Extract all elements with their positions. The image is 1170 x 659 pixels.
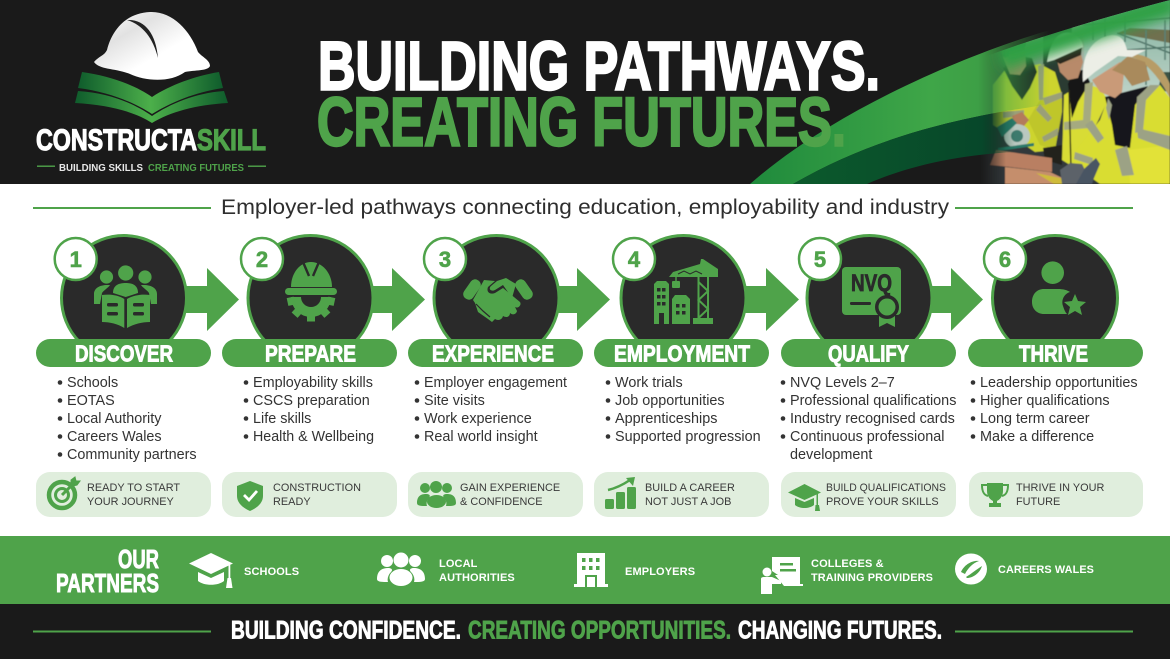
planks [990, 150, 1052, 172]
number badge [613, 238, 655, 280]
swoosh: green arc [750, 3, 1170, 184]
bullet list: Local Authority [67, 411, 162, 427]
bullet list: development [790, 447, 872, 463]
step 6: thrive [968, 236, 1143, 517]
pill heading: THRIVE [1019, 340, 1088, 366]
icon: careers wales emblem [955, 554, 987, 584]
footer slogan [231, 616, 942, 644]
bullet list: Work experience [424, 411, 532, 427]
number badge: 5 [814, 247, 826, 272]
footer slogan: CHANGING FUTURES. [738, 616, 942, 644]
pill heading: EMPLOYMENT [614, 340, 750, 366]
icon: office building [574, 553, 608, 587]
bullet list: Apprenticeships [615, 411, 717, 427]
arrow [369, 268, 425, 331]
icon: graduation cap [189, 553, 233, 588]
step 2: prepare [222, 236, 425, 517]
outcome chip: PROVE YOUR SKILLS [826, 496, 939, 508]
icon: green open book [75, 72, 228, 123]
number badge: 3 [439, 247, 451, 272]
icon: rising bar chart [605, 477, 636, 509]
number badge [241, 238, 283, 280]
partners heading: OUR [118, 544, 159, 574]
bullet list: Job opportunities [615, 393, 725, 409]
partner: local authorities: AUTHORITIES [439, 572, 515, 584]
worker left [993, 64, 1062, 152]
bullet list [58, 375, 197, 463]
number badge [984, 238, 1026, 280]
step 4: employment [594, 236, 799, 517]
bullet list: Community partners [67, 447, 197, 463]
bullet list: Long term career [980, 411, 1090, 427]
footer slogan: CREATING OPPORTUNITIES. [468, 616, 731, 644]
number badge [55, 238, 97, 280]
icon: person with star [1032, 261, 1086, 315]
icon: shield [237, 481, 263, 511]
footer band [0, 604, 1170, 659]
number badge [424, 238, 466, 280]
bullet list: Employability skills [253, 375, 373, 391]
partner: employers [574, 553, 695, 587]
partner: colleges and training providers: TRAINING PROVIDERS [811, 572, 933, 584]
circle [807, 236, 932, 360]
partners band [0, 536, 1170, 604]
outcome chip: CONSTRUCTION [273, 482, 361, 494]
subtitle strapline: Employer-led pathways connecting education, employability and industry [221, 195, 949, 219]
title [317, 28, 880, 160]
outcome chip: & CONFIDENCE [460, 496, 543, 508]
circle [621, 236, 746, 360]
arrow [183, 268, 239, 331]
outcome chip: GAIN EXPERIENCE [460, 482, 560, 494]
bullet list: Employer engagement [424, 375, 567, 391]
pill heading [36, 339, 211, 367]
pill heading [222, 339, 397, 367]
number badge: 6 [999, 247, 1011, 272]
bullet list: Work trials [615, 375, 683, 391]
bullet list: Make a difference [980, 429, 1094, 445]
logo [36, 12, 266, 174]
logo tagline: BUILDING SKILLS [59, 162, 143, 174]
partner: colleges and training providers: COLLEGES & [811, 558, 884, 570]
step 5: qualify [781, 236, 983, 517]
outcome chip: READY TO START [87, 482, 180, 494]
icon: target [49, 477, 80, 508]
header background [0, 0, 1170, 184]
outcome chip [781, 472, 956, 517]
outcome chip: READY [273, 496, 311, 508]
bullet list: Real world insight [424, 429, 538, 445]
bullet list: Continuous professional [790, 429, 944, 445]
number badge: 4 [628, 247, 641, 272]
bullet list [781, 375, 956, 463]
partner: colleges and training providers [761, 557, 933, 594]
outcome chip: FUTURE [1016, 496, 1060, 508]
pill heading [968, 339, 1143, 367]
bullet list: Health & Wellbeing [253, 429, 374, 445]
partner: careers wales [955, 554, 1094, 584]
worker right [1072, 85, 1170, 184]
outcome chip [969, 472, 1143, 517]
bullet list: Schools [67, 375, 118, 391]
bullet list: Life skills [253, 411, 311, 427]
arrow [555, 268, 610, 331]
footer slogan: BUILDING CONFIDENCE. [231, 616, 461, 644]
outcome chip [222, 472, 397, 517]
bullet list [415, 375, 567, 445]
bullet list: Supported progression [615, 429, 761, 445]
icon: graduation cap [788, 484, 821, 511]
outcome chip: NOT JUST A JOB [645, 496, 731, 508]
outcome chip [408, 472, 583, 517]
logo wordmark: CONSTRUCTA [36, 124, 197, 157]
partner: local authorities [377, 552, 515, 586]
icon: handshake [461, 277, 535, 322]
bullet list [971, 375, 1138, 445]
bullet list: NVQ Levels 2–7 [790, 375, 895, 391]
icon: NVQ certificate: NVQ [851, 270, 892, 297]
bullet list: Industry recognised cards [790, 411, 955, 427]
bullet list: Leadership opportunities [980, 375, 1138, 391]
icon: white hard hat [94, 12, 210, 80]
partner: schools [189, 553, 299, 588]
outcome chip [594, 472, 769, 517]
partner: schools: SCHOOLS [244, 566, 299, 578]
icon: trophy [982, 483, 1008, 507]
outcome chip: THRIVE IN YOUR [1016, 482, 1105, 494]
circle [248, 236, 373, 360]
pill heading: EXPERIENCE [432, 340, 554, 366]
partner: local authorities: LOCAL [439, 558, 478, 570]
step 3: experience [408, 236, 610, 517]
icon: teacher at board [761, 557, 803, 594]
icon: buildings and crane [654, 259, 718, 324]
bullet list: Site visits [424, 393, 485, 409]
partners heading [56, 544, 159, 598]
outcome chip [36, 472, 211, 517]
icon: group of people [417, 481, 456, 508]
number badge: 1 [70, 247, 82, 272]
pill heading: QUALIFY [828, 340, 909, 366]
logo wordmark: SKILL [197, 124, 266, 157]
arrow [928, 268, 983, 331]
bullet list: Careers Wales [67, 429, 162, 445]
bullet list [244, 375, 374, 445]
title: CREATING FUTURES. [317, 84, 846, 160]
number badge [799, 238, 841, 280]
partner: careers wales: CAREERS WALES [998, 564, 1094, 576]
title: BUILDING PATHWAYS. [318, 28, 880, 104]
pill heading: DISCOVER [75, 340, 173, 366]
bullet list: CSCS preparation [253, 393, 370, 409]
worker middle [1062, 84, 1108, 165]
circle [62, 236, 186, 360]
logo tagline [37, 162, 266, 174]
logo tagline: CREATING FUTURES [148, 162, 244, 174]
pill heading [781, 339, 956, 367]
pill heading: PREPARE [265, 340, 356, 366]
icon: NVQ certificate [842, 267, 901, 327]
icon: hard hat and gear [285, 262, 337, 322]
header photo: construction learners [980, 0, 1170, 184]
icon: group of people [377, 552, 425, 586]
bullet list [606, 375, 761, 445]
icon: people reading [94, 265, 157, 328]
partner: employers: EMPLOYERS [625, 566, 695, 578]
circle [434, 236, 559, 360]
outcome chip: YOUR JOURNEY [87, 496, 174, 508]
outcome chip: BUILD QUALIFICATIONS [826, 482, 946, 494]
outcome chip: BUILD A CAREER [645, 482, 735, 494]
number badge: 2 [256, 247, 268, 272]
arrow [742, 268, 799, 331]
circle [992, 236, 1118, 360]
step 1: discover [36, 236, 239, 517]
bullet list: EOTAS [67, 393, 115, 409]
bullet list: Professional qualifications [790, 393, 956, 409]
partners heading: PARTNERS [56, 568, 159, 598]
bullet list: Higher qualifications [980, 393, 1110, 409]
